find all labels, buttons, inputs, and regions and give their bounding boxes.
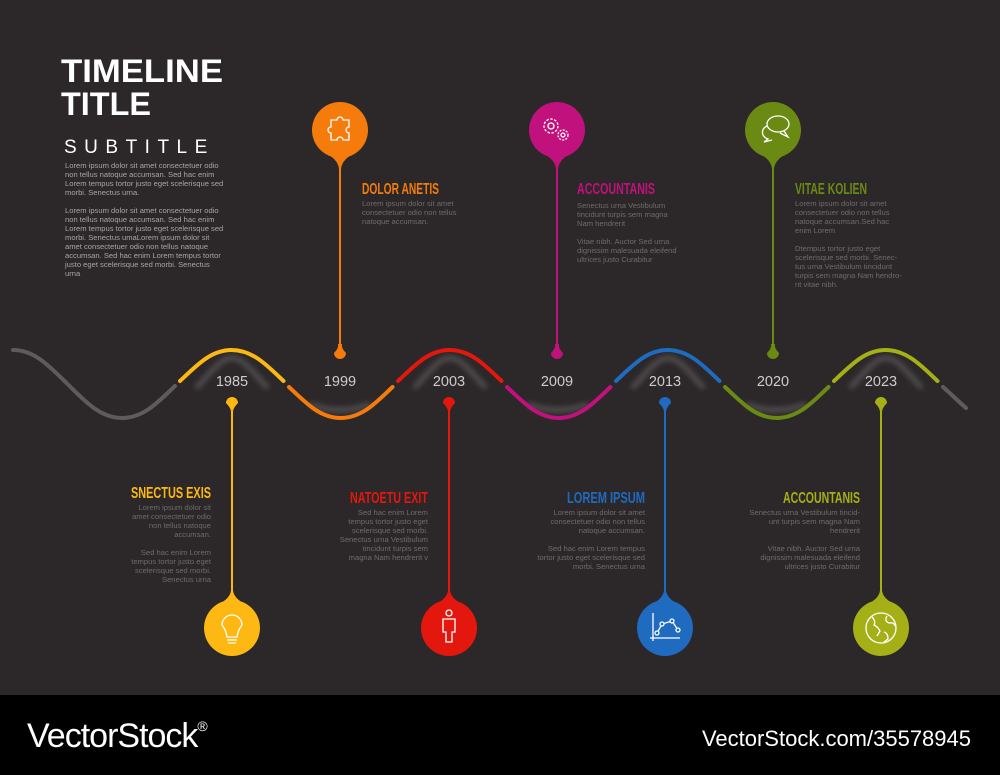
text block: lorem ipsum: Sed hac enim Lorem tempus bbox=[548, 544, 645, 553]
text block: vitae kolien: enim Lorem bbox=[795, 226, 835, 235]
title: TITLE bbox=[61, 86, 151, 122]
intro text: amet consectetuer odio non tellus natoque bbox=[65, 242, 208, 251]
pin: 2003 red bottom bbox=[421, 397, 477, 656]
intro text bbox=[64, 161, 223, 278]
footer bar: ® bbox=[197, 718, 208, 734]
icon: bulb bbox=[222, 615, 242, 643]
text block: accountanis magenta: Senectus urna Vestibulum bbox=[577, 201, 665, 210]
text block: accountanis magenta: tincidunt turpis sem magna bbox=[577, 210, 669, 219]
text block: vitae kolien: Dtempus tortor justo eget bbox=[795, 244, 881, 253]
text block: natoetu exit: Sed hac enim Lorem bbox=[358, 508, 428, 517]
footer bar: VectorStock bbox=[27, 717, 197, 755]
intro text: non tellus natoque accumsan. Sed hac enim bbox=[65, 170, 214, 179]
text block: accountanis yellow-green: unt turpis sem magna Nam bbox=[769, 517, 860, 526]
text block: accountanis yellow-green: dignissim malesuada eleifend bbox=[760, 553, 860, 562]
text block: accountanis yellow-green: Senectus urna Vestibulum tincid- bbox=[749, 508, 860, 517]
title bbox=[61, 53, 223, 122]
text block: snectus exis: SNECTUS EXIS bbox=[131, 485, 211, 502]
text block: dolor anetis bbox=[362, 181, 457, 226]
text block: lorem ipsum: natoque accumsan. bbox=[579, 526, 645, 535]
text block: natoetu exit: magna Nam hendrerit v bbox=[349, 553, 428, 562]
text block: snectus exis: non tellus natoque bbox=[149, 521, 211, 530]
text block: snectus exis: Senectus urna bbox=[162, 575, 212, 584]
text block: vitae kolien: Lorem ipsum dolor sit amet bbox=[795, 199, 887, 208]
icon: gears bbox=[544, 119, 568, 140]
text block: vitae kolien: consectetuer odio non tellus bbox=[795, 208, 890, 217]
text block: natoetu exit: NATOETU EXIT bbox=[350, 490, 428, 507]
pin: 2009 magenta top bbox=[529, 102, 585, 359]
year labels: 1985 bbox=[216, 374, 248, 390]
footer bar: VectorStock.com/35578945 bbox=[702, 726, 971, 751]
text block: accountanis yellow-green: ultrices justo Curabitur bbox=[784, 562, 860, 571]
text block: snectus exis: amet consectetuer odio bbox=[132, 512, 211, 521]
wave timeline bbox=[13, 350, 966, 418]
icon: speech bubbles bbox=[762, 116, 789, 142]
text block: accountanis magenta: Nam hendrerit bbox=[577, 219, 626, 228]
year labels: 1999 bbox=[324, 374, 356, 390]
pin: 2013 blue bottom bbox=[637, 397, 693, 656]
text block: natoetu exit: Senectus urna Vestibulum bbox=[340, 535, 428, 544]
text block: dolor anetis: Lorem ipsum dolor sit amet bbox=[362, 199, 454, 208]
icon: puzzle bbox=[328, 117, 349, 140]
intro text: non tellus natoque accumsan. Sed hac enim bbox=[65, 215, 214, 224]
intro text: accumsan. Sed hac enim Lorem tempus tortor bbox=[65, 251, 221, 260]
text block: dolor anetis: consectetuer odio non tellus bbox=[362, 208, 457, 217]
text block: accountanis magenta: dignissim malesuada eleifend bbox=[577, 246, 677, 255]
text block: accountanis yellow-green bbox=[749, 490, 861, 571]
wave shadows bbox=[196, 358, 922, 410]
year labels: 2009 bbox=[541, 374, 573, 390]
text block: lorem ipsum: LOREM IPSUM bbox=[567, 490, 645, 507]
year labels: 2023 bbox=[865, 374, 897, 390]
text block: natoetu exit: tincidunt turpis sem bbox=[363, 544, 428, 553]
intro text: urna bbox=[65, 269, 81, 278]
text block: natoetu exit: scelerisque sed morbi. bbox=[352, 526, 428, 535]
intro text: justo eget scelerisque sed morbi. Senectus bbox=[64, 260, 210, 269]
pin: 2023 yellow-green bottom bbox=[853, 397, 909, 656]
pin: 1999 orange top bbox=[312, 102, 368, 359]
year labels: 2003 bbox=[433, 374, 465, 390]
text block: lorem ipsum: tortor justo eget scelerisque sed bbox=[537, 553, 645, 562]
text block: lorem ipsum bbox=[537, 490, 646, 571]
text block: vitae kolien: VITAE KOLIEN bbox=[795, 181, 867, 198]
text block: natoetu exit: tempus tortor justo eget bbox=[348, 517, 429, 526]
text block: vitae kolien: tus urna Vestibulum tincidunt bbox=[795, 262, 893, 271]
text block: natoetu exit bbox=[340, 490, 429, 562]
text block: lorem ipsum: morbi. Senectus urna bbox=[573, 562, 646, 571]
text block: lorem ipsum: Lorem ipsum dolor sit amet bbox=[553, 508, 646, 517]
pin: 1985 yellow bottom bbox=[204, 397, 260, 656]
title: TIMELINE bbox=[61, 53, 223, 89]
icon: globe bbox=[866, 613, 896, 643]
intro text: morbi. Senectus urna. bbox=[65, 188, 139, 197]
text block: accountanis magenta bbox=[577, 181, 677, 264]
text block: snectus exis bbox=[131, 485, 212, 584]
intro text: Lorem tempus tortor justo eget scelerisque sed bbox=[65, 224, 223, 233]
text block: snectus exis: accumsan. bbox=[174, 530, 211, 539]
text block: accountanis yellow-green: hendrerit bbox=[830, 526, 861, 535]
intro text: Lorem tempus tortor justo eget scelerisque sed bbox=[65, 179, 223, 188]
footer bar bbox=[0, 695, 1000, 775]
text block: accountanis magenta: ultrices justo Curabitur bbox=[577, 255, 653, 264]
intro text: Lorem ipsum dolor sit amet consectetuer odio bbox=[65, 161, 219, 170]
text block: dolor anetis: natoque accumsan. bbox=[362, 217, 428, 226]
year labels bbox=[216, 374, 897, 390]
text block: dolor anetis: DOLOR ANETIS bbox=[362, 181, 439, 198]
year labels: 2020 bbox=[757, 374, 789, 390]
icon: person bbox=[443, 610, 455, 642]
text block: accountanis yellow-green: ACCOUNTANIS bbox=[783, 490, 860, 507]
subtitle: SUBTITLE bbox=[64, 137, 215, 158]
text block: snectus exis: Sed hac enim Lorem bbox=[141, 548, 211, 557]
intro text: morbi. Senectus umaLorem ipsum dolor sit bbox=[65, 233, 210, 242]
text block: vitae kolien: natoque accumsan.Sed hac bbox=[795, 217, 889, 226]
pin: 2020 green top bbox=[745, 102, 801, 359]
text block: vitae kolien: scelerisque sed morbi. Senec- bbox=[795, 253, 898, 262]
intro text: Lorem ipsum dolor sit amet consectetuer odio bbox=[65, 206, 219, 215]
text block: accountanis yellow-green: Vitae nibh. Auctor Sed urna bbox=[768, 544, 861, 553]
icon: chart bbox=[650, 613, 680, 641]
year labels: 2013 bbox=[649, 374, 681, 390]
text block: snectus exis: scelerisque sed morbi. bbox=[135, 566, 211, 575]
text block: vitae kolien: rit vitae nibh. bbox=[795, 280, 838, 289]
text block: snectus exis: Lorem ipsum dolor sit bbox=[138, 503, 212, 512]
text block: snectus exis: tempus tortor justo eget bbox=[131, 557, 212, 566]
text block: lorem ipsum: consectetuer odio non tellus bbox=[550, 517, 645, 526]
text block: vitae kolien: turpis sem magna Nam hendro- bbox=[795, 271, 902, 280]
text block: accountanis magenta: Vitae nibh. Auctor Sed urna bbox=[577, 237, 670, 246]
text block: accountanis magenta: ACCOUNTANIS bbox=[577, 181, 655, 198]
text block: vitae kolien bbox=[795, 181, 902, 289]
